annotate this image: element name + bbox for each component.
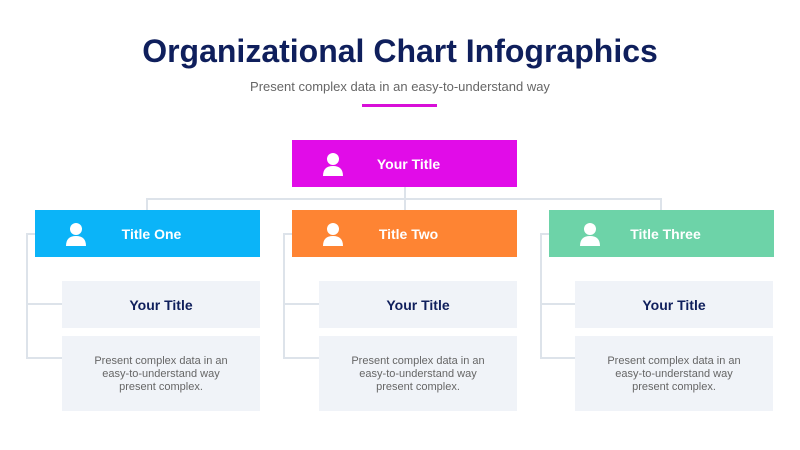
card title 2: Your Title <box>386 296 450 312</box>
card desc 1 <box>62 336 260 411</box>
card title 1: Your Title <box>129 296 193 312</box>
box: Title One <box>35 210 260 257</box>
title: Organizational Chart Infographics <box>142 33 658 69</box>
card title 1 <box>62 281 260 328</box>
card title 3 <box>575 281 773 328</box>
card title 2 <box>319 281 517 328</box>
top box: Your Title <box>377 156 440 172</box>
icon: person <box>323 153 343 176</box>
card desc 3: Present complex data in an easy-to-understand way present complex. <box>607 355 741 393</box>
card desc 2 <box>319 336 517 411</box>
box: Title Two <box>292 210 517 257</box>
card desc 1: Present complex data in an easy-to-understand way present complex. <box>94 355 228 393</box>
box: Title One: Title One <box>122 226 181 242</box>
box: Title Three <box>549 210 774 257</box>
card title 3: Your Title <box>642 296 706 312</box>
top box <box>292 140 517 187</box>
card desc 3 <box>575 336 773 411</box>
box: Title Three: Title Three <box>630 226 701 242</box>
underline accent <box>362 104 437 107</box>
box: Title Two: Title Two <box>379 226 438 242</box>
subtitle: Present complex data in an easy-to-understand way <box>250 79 550 94</box>
card desc 2: Present complex data in an easy-to-understand way present complex. <box>351 355 485 393</box>
